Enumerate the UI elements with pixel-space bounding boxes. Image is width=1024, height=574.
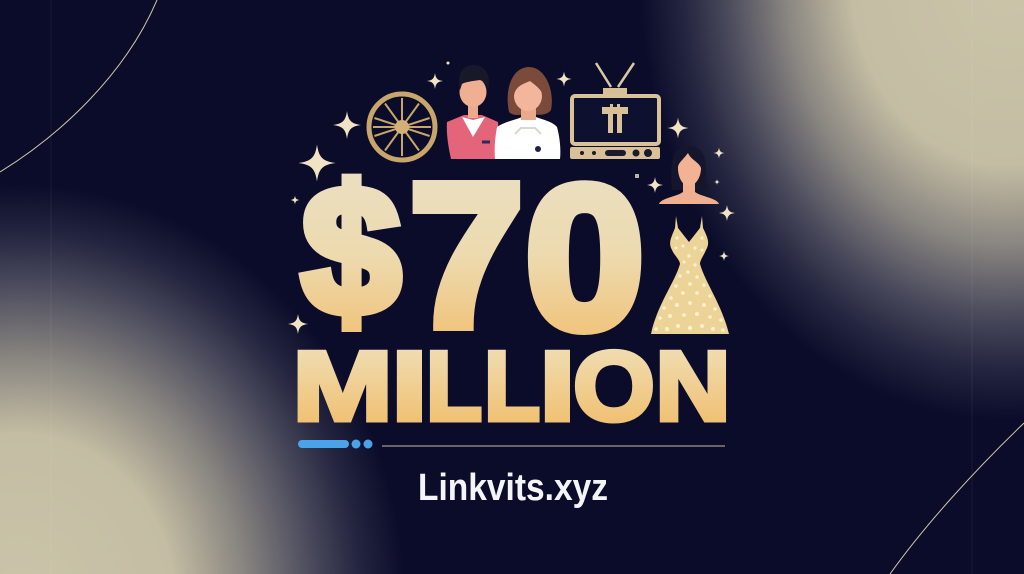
icon: ship wheel	[369, 94, 435, 160]
headline: MILLION: O	[573, 331, 655, 441]
icon: woman with dark hair	[659, 146, 719, 204]
decorative curve: bottom right	[890, 423, 1024, 574]
headline: $70: 0	[525, 145, 644, 371]
decorative curve: top left	[0, 0, 157, 172]
site name: Linkvits.xyz	[418, 467, 608, 509]
headline: $70: 7	[409, 142, 524, 369]
headline: MILLION: N	[656, 331, 730, 441]
icon: woman in pink top	[447, 65, 498, 159]
headline: MILLION: I	[540, 332, 575, 441]
icon: sparkling dress	[651, 216, 729, 334]
icon: woman in white jacket	[495, 67, 560, 159]
headline: MILLION: L	[484, 332, 540, 442]
sparkles	[288, 62, 735, 334]
headline: MILLION	[293, 331, 730, 442]
headline: MILLION: L	[426, 332, 482, 442]
headline: MILLION: M	[293, 332, 393, 442]
headline: MILLION: I	[392, 332, 427, 441]
headline: $70: $	[302, 150, 400, 352]
divider with blue accent	[298, 440, 725, 448]
icon: television	[570, 63, 660, 159]
headline: $70	[302, 142, 644, 371]
